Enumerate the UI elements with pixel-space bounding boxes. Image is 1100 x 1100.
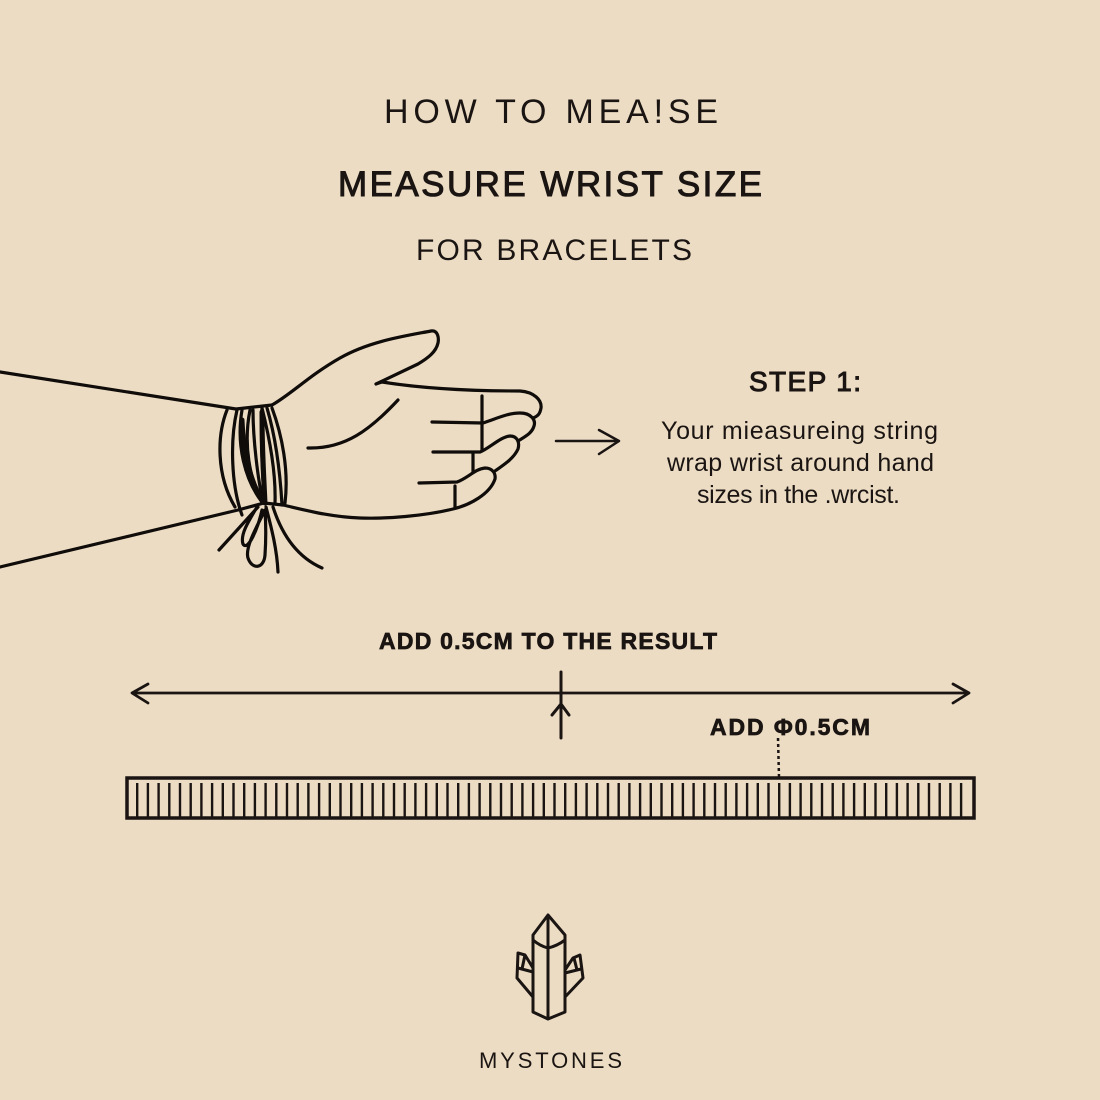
forearm bottom edge: [0, 503, 283, 567]
step description: Your mieasureing string: [661, 417, 938, 445]
ruler ticks: [136, 783, 963, 817]
step description: [661, 417, 938, 509]
palm crease: [308, 400, 398, 448]
step description: wrap wrist around hand: [666, 449, 934, 477]
subtitle: for bracelets: FOR BRACELETS: [416, 234, 692, 267]
title: how to measure: HOW TO MEA!SE: [384, 93, 718, 131]
label: add 0.5cm: ADD Φ0.5CM: [710, 714, 870, 740]
ring finger and lower palm: [283, 468, 495, 518]
ruler: [127, 778, 974, 818]
string wraps: [220, 408, 286, 515]
finger crease lines: [455, 396, 482, 507]
middle finger: [433, 436, 519, 471]
step description: sizes in the .wrcist.: [697, 481, 900, 509]
knot shadow: [242, 412, 265, 503]
logo: crystal: [517, 915, 583, 1019]
forearm top edge: [0, 372, 272, 409]
arrow: hand to step: [556, 430, 619, 454]
step heading: STEP 1:: [749, 366, 861, 397]
double-headed measurement arrow: [132, 672, 969, 738]
loose string ends and loops: [219, 507, 322, 572]
label: add 0.5cm to the result: ADD 0.5CM TO THE RESULT: [379, 628, 717, 654]
brand name: MYSTONES: [479, 1048, 622, 1073]
title: measure wrist size: MEASURE WRIST SIZE: [338, 165, 762, 204]
back of hand and thumb: [272, 331, 541, 418]
illustration: hand with string around wrist: [0, 331, 541, 572]
dotted leader line: [778, 738, 779, 777]
index finger: [432, 413, 534, 441]
centre marker with up arrow: [552, 672, 569, 738]
